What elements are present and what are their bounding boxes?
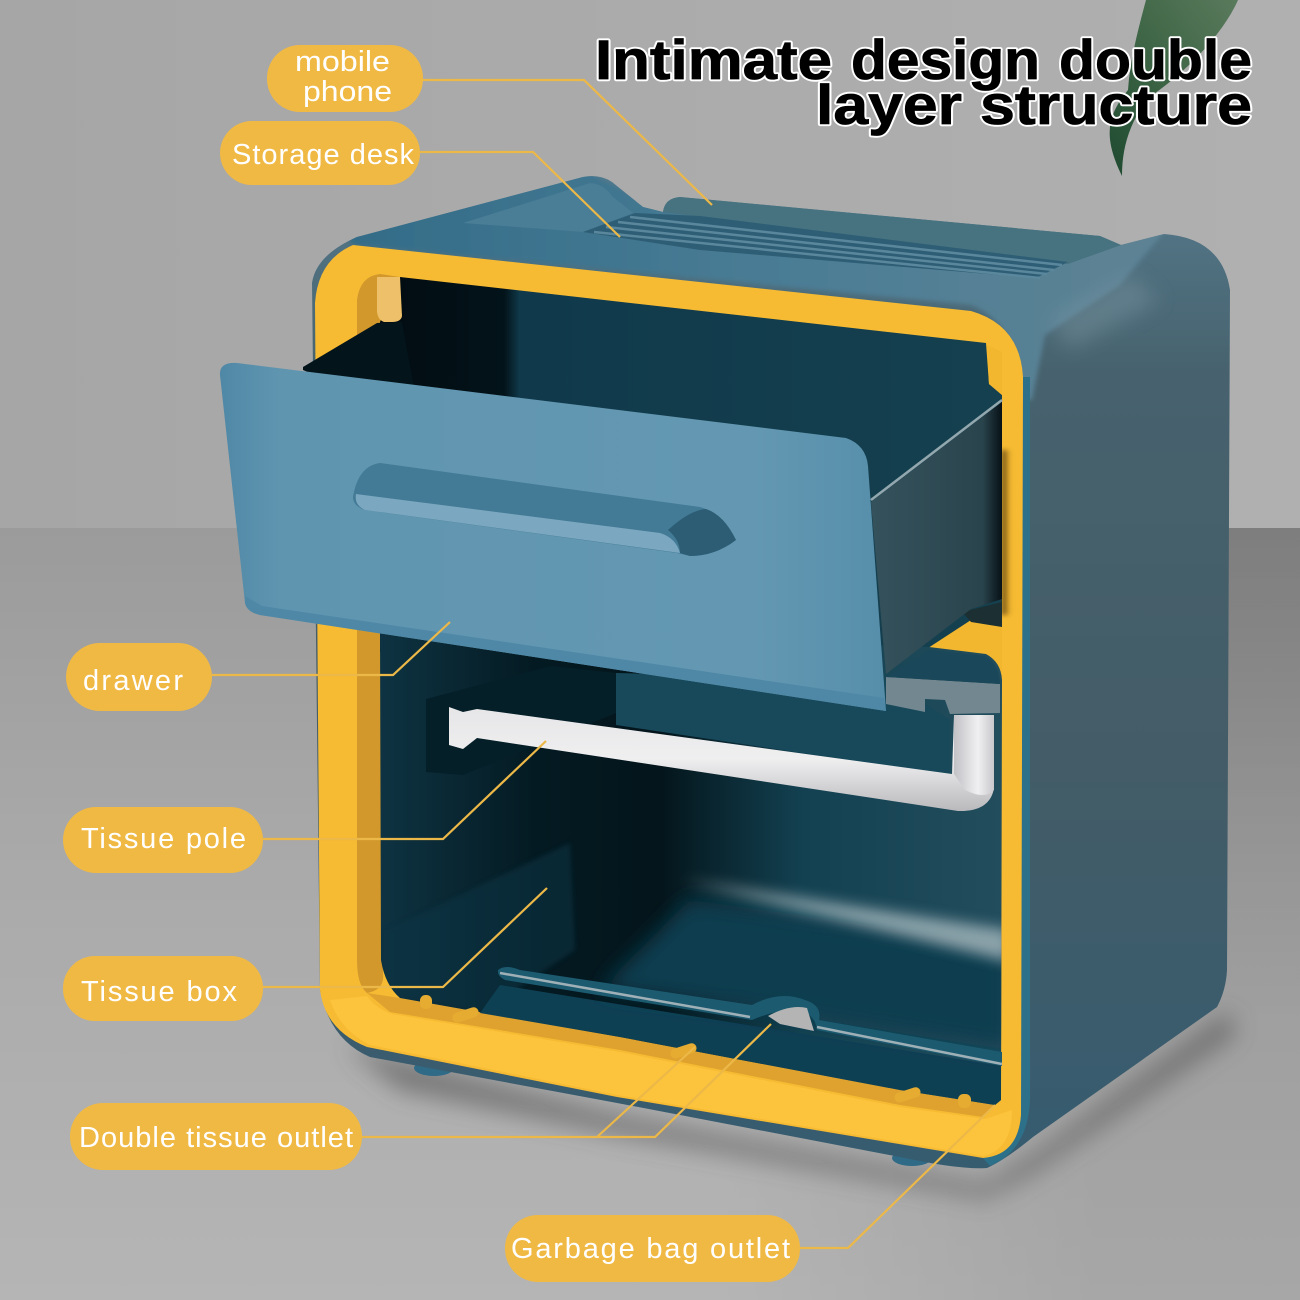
light band on back wall	[682, 880, 1010, 962]
tissue outlet notch	[768, 1007, 814, 1031]
right frame shadow	[1002, 450, 1013, 615]
title	[595, 28, 1252, 136]
drawer side	[871, 402, 1002, 674]
lower opening	[380, 630, 1002, 1105]
label: mobile phone: phone	[303, 76, 392, 108]
frame pegs	[420, 995, 971, 1108]
leader: double tissue outlet	[362, 1024, 771, 1137]
title: layer	[816, 73, 962, 136]
label: garbage bag outlet	[505, 1215, 800, 1282]
title: structure	[980, 73, 1252, 136]
top surface	[340, 170, 1170, 400]
label: tissue pole	[63, 807, 263, 873]
leader: tissue box	[263, 888, 547, 987]
panel: drawer	[220, 363, 1002, 711]
label: double tissue outlet	[70, 1103, 362, 1170]
drawer interior left edge	[303, 322, 420, 420]
front bottom edge	[245, 596, 886, 711]
drawer front	[220, 363, 886, 711]
frame edge strip	[983, 377, 1030, 1166]
icon: plant leaf	[1110, 0, 1238, 176]
divider shadow	[962, 602, 1002, 627]
label: double tissue outlet: Double tissue outlet	[79, 1122, 353, 1154]
left wall panel	[384, 843, 575, 1013]
pole mount	[886, 677, 1000, 714]
tissue pole bracket	[426, 666, 616, 775]
rubber feet	[414, 1060, 454, 1076]
tissue box floor	[480, 985, 1001, 1105]
label: tissue box: Tissue box	[81, 976, 238, 1008]
product: tissue box organiser	[303, 170, 1230, 1168]
leader lines	[212, 80, 995, 1248]
leader: tissue pole	[263, 741, 546, 839]
yellow frame	[315, 245, 1023, 1158]
title: design	[851, 28, 1040, 91]
mount cap	[886, 650, 1000, 684]
upper pole recess	[616, 673, 950, 775]
bottom frame lip	[367, 993, 995, 1117]
tissue pole	[449, 707, 994, 811]
label: tissue pole: Tissue pole	[81, 823, 246, 855]
leader: storage desk	[420, 152, 620, 237]
leader: drawer	[212, 622, 450, 675]
title: double	[1059, 28, 1252, 91]
label: storage desk	[220, 121, 420, 185]
tissue outlet ledge	[498, 967, 1002, 1066]
title: Intimate	[595, 28, 832, 91]
shadow under product	[345, 1012, 1236, 1198]
storage ribs	[583, 213, 1068, 278]
drawer rim	[871, 400, 1002, 500]
yellow divider	[925, 620, 1002, 682]
leader: garbage bag outlet	[800, 1105, 995, 1248]
body shell	[312, 176, 1230, 1168]
back floor area	[600, 900, 1010, 1050]
title: layer	[816, 73, 962, 136]
lit corner of shell	[1056, 278, 1150, 346]
bright bottom band	[330, 996, 1012, 1156]
title: double	[1059, 28, 1252, 91]
label: mobile phone	[267, 45, 423, 112]
label: tissue box	[63, 956, 263, 1021]
leader: mobile phone	[422, 80, 712, 205]
label: garbage bag outlet: Garbage bag outlet	[511, 1233, 790, 1265]
label: drawer: drawer	[83, 665, 183, 697]
top opening back wall	[380, 277, 1002, 652]
phone slot	[663, 197, 1121, 264]
title: structure	[980, 73, 1252, 136]
ledge highlights	[500, 973, 1002, 1064]
storage desk recess	[463, 183, 633, 232]
label: mobile phone: mobile	[295, 46, 390, 78]
clip at upper left	[377, 277, 402, 322]
clip at upper right	[987, 345, 1002, 395]
label: drawer	[66, 643, 212, 711]
label: storage desk: Storage desk	[232, 139, 414, 171]
title: design	[851, 28, 1040, 91]
title: Intimate	[595, 28, 832, 91]
left frame inner shade	[357, 274, 400, 993]
drawer handle	[353, 463, 736, 556]
